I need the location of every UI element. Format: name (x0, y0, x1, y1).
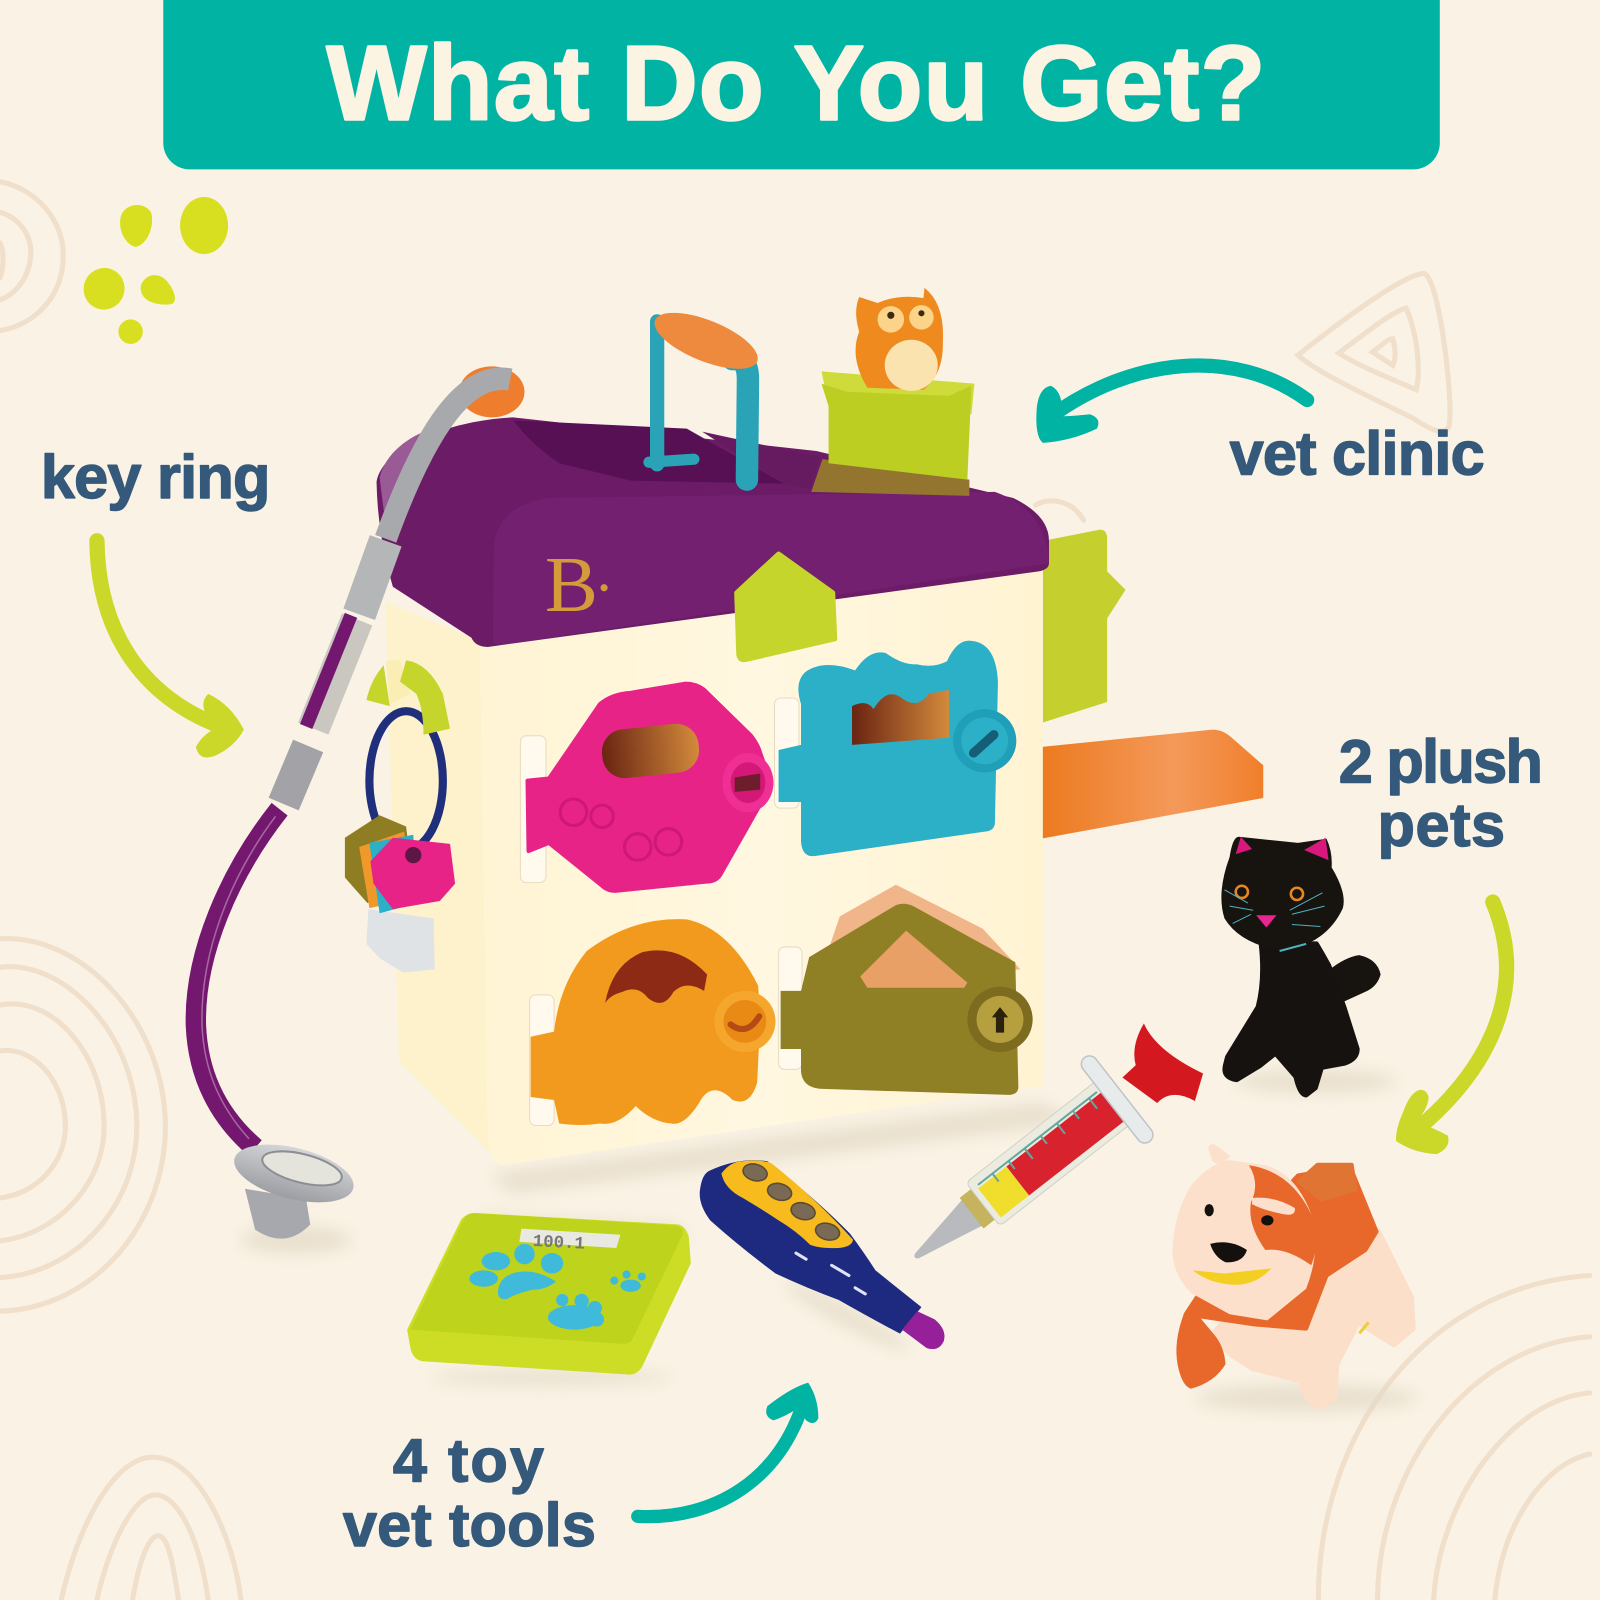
whiskers (1224, 890, 1324, 951)
teal key (369, 835, 418, 913)
cream hook (386, 659, 410, 704)
vet clinic toy (377, 288, 1263, 1165)
pink key (370, 838, 455, 909)
arrow: plush pets (1396, 902, 1507, 1154)
display (519, 1229, 620, 1248)
gray tube (386, 379, 510, 539)
purple tip (902, 1311, 944, 1349)
2 plush pets label: pets (1378, 791, 1505, 859)
gray connector (359, 541, 386, 614)
nose (1256, 915, 1277, 928)
lime hook (366, 660, 450, 735)
header banner (163, 0, 1440, 169)
orange face patch (1249, 1165, 1316, 1265)
chest piece ring (228, 1134, 359, 1213)
hinges (520, 698, 802, 1126)
orange shelf (1041, 730, 1263, 839)
tail (1329, 955, 1381, 1003)
navy body (700, 1160, 921, 1334)
indicator lights (741, 1161, 841, 1243)
lime roof latch (737, 554, 835, 660)
toy thermometer (700, 1160, 944, 1349)
clinic left side (386, 602, 502, 1165)
arrow: key ring (97, 541, 244, 757)
cream rump and legs (1212, 1204, 1413, 1407)
earpiece (459, 366, 524, 417)
blue door (779, 641, 1016, 856)
ground shadows (240, 1069, 1418, 1412)
toy scale (407, 1213, 691, 1375)
junction (284, 746, 308, 804)
B logo: B (545, 541, 598, 629)
toy syringe (882, 1023, 1203, 1299)
orange door (531, 919, 776, 1125)
yellow panel (721, 1161, 853, 1248)
orange back (1186, 1166, 1377, 1329)
silver key blades (366, 909, 435, 972)
eyes (1205, 1204, 1214, 1216)
top tuft (1208, 1144, 1231, 1165)
clinic front (480, 559, 1043, 1165)
yellow mouth (1193, 1268, 1271, 1285)
owl figure (856, 288, 943, 391)
title: What Do You Get? (327, 24, 1265, 142)
key hole (405, 847, 421, 863)
logo dot (601, 584, 608, 591)
bulldog plush (1172, 1144, 1413, 1407)
handle (647, 301, 765, 480)
lime chimney box (821, 384, 971, 480)
orange key (359, 832, 416, 908)
key ring with keys (345, 659, 455, 972)
brow (1252, 1198, 1295, 1215)
chest piece bump (245, 1189, 310, 1239)
4 toy vet tools label: 4 toy (393, 1427, 544, 1495)
key ring label: key ring (41, 443, 270, 511)
toy scale: 100.1 (532, 1233, 585, 1255)
chimney shadow (811, 459, 969, 496)
chest piece opening (259, 1145, 345, 1192)
olive key (345, 815, 413, 903)
stethoscope (196, 366, 524, 1239)
dog nose (1210, 1242, 1247, 1262)
ear (1298, 1164, 1356, 1200)
purple roof (377, 417, 1049, 647)
4 toy vet tools label: vet tools (343, 1491, 596, 1559)
vet clinic label: vet clinic (1230, 419, 1485, 487)
clear sheath (313, 619, 357, 729)
purple tube inside sheath (306, 615, 351, 727)
4 toy vet tools label (343, 1427, 596, 1559)
syringe barrel and nozzle (882, 1053, 1156, 1299)
2 plush pets label: 2 plush (1339, 728, 1543, 796)
head cream (1172, 1160, 1315, 1320)
black cat plush (1221, 837, 1381, 1095)
head (1221, 837, 1344, 951)
body (1225, 944, 1357, 1095)
ears (1236, 837, 1252, 854)
body highlights (796, 1253, 865, 1294)
2 plush pets label (1339, 728, 1543, 859)
arrow: vet tools (638, 1383, 818, 1517)
roof left highlight (380, 429, 434, 520)
tube highlight (202, 816, 276, 1139)
olive door (781, 885, 1033, 1095)
front leg orange (1176, 1314, 1226, 1389)
roof front face (493, 492, 1049, 645)
roof cavity right (702, 432, 819, 489)
lime dots (78, 197, 228, 344)
lime chimney rim (821, 371, 974, 414)
roof cavity (513, 420, 784, 484)
green side tab (1043, 530, 1126, 722)
pink door (528, 684, 773, 891)
tag (1358, 1321, 1370, 1334)
red plunger (1122, 1023, 1203, 1103)
eyes (1236, 886, 1248, 898)
arrow: vet clinic (1036, 365, 1307, 443)
ring (369, 711, 443, 850)
paw prints (469, 1244, 646, 1330)
purple lower tubes (196, 809, 280, 1148)
